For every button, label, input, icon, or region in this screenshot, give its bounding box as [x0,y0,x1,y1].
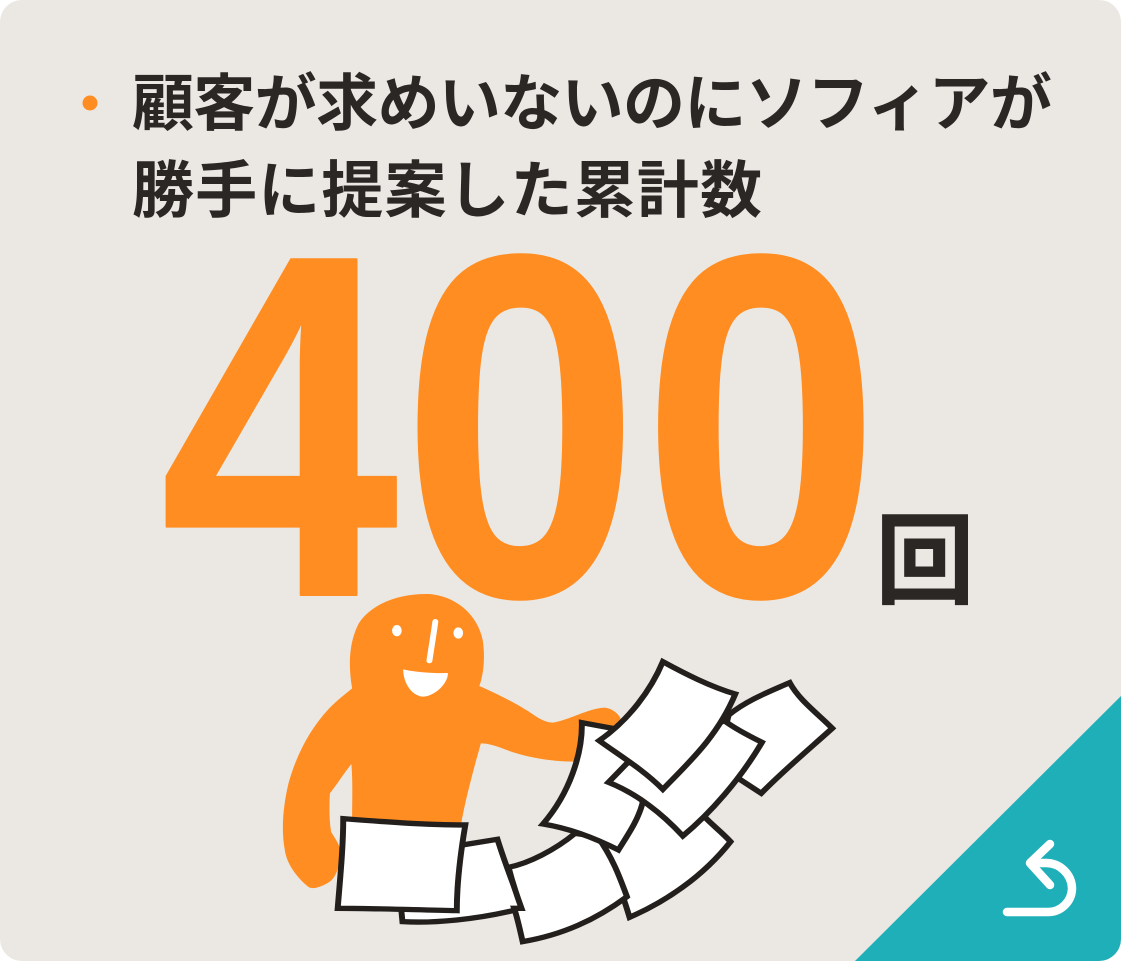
icon: return arrow [1007,844,1072,912]
person [283,594,621,888]
bullet [82,96,98,110]
teal corner triangle [855,696,1121,961]
mouth [403,669,448,697]
papers [338,662,832,942]
heading: 勝手に提案した累計数 [132,157,762,226]
illustration: person with papers [283,594,832,942]
unit: 回 [875,506,975,618]
big number: 400 [160,154,880,699]
eyes [392,625,402,636]
heading: 顧客が求めいないのにソフィアが [132,70,1052,139]
nose [429,622,435,661]
heading [132,70,1052,226]
